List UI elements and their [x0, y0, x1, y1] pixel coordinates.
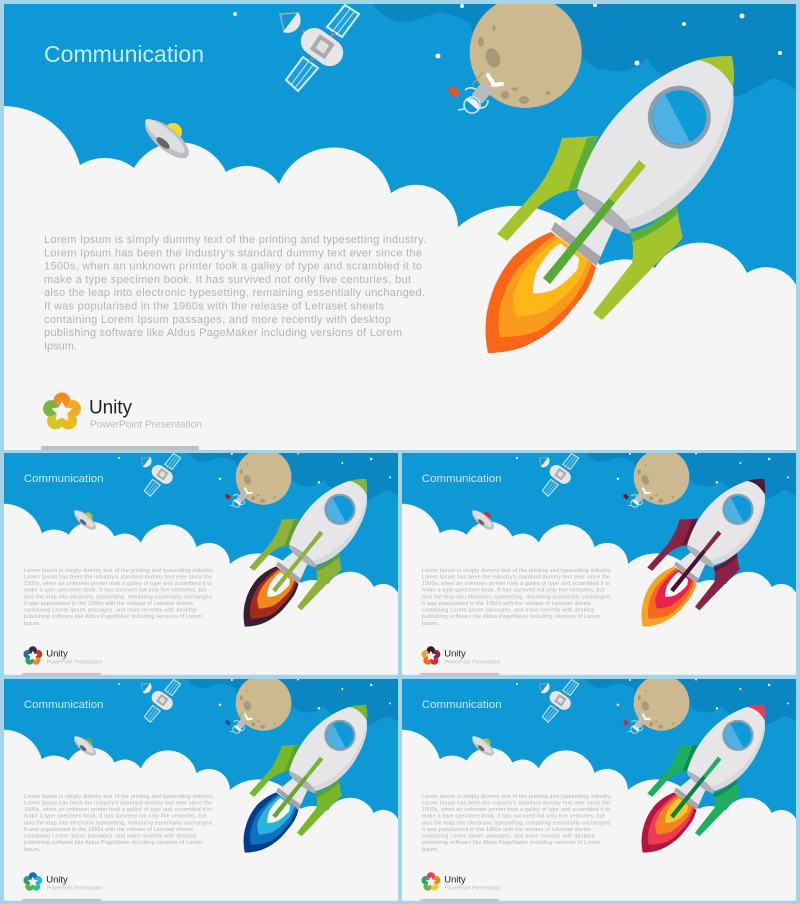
body text: publishing software like Aldus PageMaker including versions of Lorem — [422, 840, 600, 846]
title: Communication — [24, 473, 104, 485]
body text: Lorem Ipsum has been the industry's standard dummy text ever since the — [422, 801, 610, 807]
rocket — [486, 56, 734, 353]
body text: also the leap into electronic typesetting, remaining essentially unchanged. — [24, 820, 214, 826]
logo subtitle: PowerPoint Presentation — [47, 886, 103, 892]
astronaut — [225, 713, 252, 733]
logo subtitle: PowerPoint Presentation — [47, 660, 103, 666]
footer bar — [420, 899, 499, 901]
body text: Ipsum. — [422, 847, 439, 853]
astronaut — [225, 487, 252, 507]
logo wordmark: Unity — [46, 875, 68, 886]
panel: slide variant maroon — [402, 449, 797, 675]
sky background — [402, 679, 796, 901]
body text: It was popularised in the 1960s with the release of Letraset sheets — [422, 827, 591, 833]
ufo — [74, 510, 96, 530]
body text — [24, 568, 214, 627]
panel: slide variant red flame — [4, 449, 399, 675]
astronaut — [623, 713, 650, 733]
body text: also the leap into electronic typesetting, remaining essentially unchanged. — [44, 287, 425, 299]
logo wordmark: Unity — [89, 398, 132, 418]
body text: It was popularised in the 1960s with the release of Letraset sheets — [24, 827, 193, 833]
panel: slide variant blue flame — [4, 675, 399, 901]
logo subtitle: PowerPoint Presentation — [90, 420, 202, 430]
satellite — [539, 679, 579, 722]
body text: Lorem Ipsum is simply dummy text of the printing and typesetting industry. — [24, 568, 214, 574]
body text — [24, 794, 214, 853]
stars — [233, 3, 782, 66]
body text: Ipsum. — [422, 621, 439, 627]
body text: make a type specimen book. It has survived not only five centuries, but — [24, 588, 207, 594]
logo wordmark: Unity — [444, 649, 466, 660]
sky background — [4, 679, 398, 901]
body text: 1500s, when an unknown printer took a galley of type and scrambled it to — [422, 807, 610, 813]
body text — [422, 794, 612, 853]
dark sky band — [373, 4, 797, 100]
rocket — [642, 705, 765, 853]
logo wordmark: Unity — [46, 649, 68, 660]
title: Communication — [44, 41, 204, 67]
moon — [634, 449, 689, 505]
moon — [236, 675, 291, 731]
body text: publishing software like Aldus PageMaker including versions of Lorem — [24, 614, 202, 620]
logo icon — [23, 646, 42, 665]
ufo — [469, 507, 497, 533]
body text: Lorem Ipsum is simply dummy text of the printing and typesetting industry. — [24, 794, 214, 800]
ufo — [469, 733, 497, 759]
body text: containing Lorem Ipsum passages, and more recently with desktop — [422, 608, 595, 614]
satellite — [141, 679, 181, 722]
body text: 1500s, when an unknown printer took a galley of type and scrambled it to — [24, 581, 212, 587]
logo icon — [420, 646, 441, 666]
rocket — [642, 479, 765, 627]
body text: containing Lorem Ipsum passages, and more recently with desktop — [44, 314, 391, 326]
body text: containing Lorem Ipsum passages, and more recently with desktop — [24, 834, 197, 840]
ufo — [145, 119, 189, 158]
sky background — [4, 453, 398, 675]
stars — [118, 453, 391, 484]
body text: make a type specimen book. It has survived not only five centuries, but — [24, 814, 207, 820]
satellite — [141, 453, 181, 496]
logo icon — [43, 392, 81, 430]
body text: Lorem Ipsum is simply dummy text of the printing and typesetting industry. — [422, 794, 612, 800]
dark sky band — [188, 679, 399, 727]
body text: publishing software like Aldus PageMaker including versions of Lorem — [422, 614, 600, 620]
clouds — [402, 730, 797, 901]
footer bar — [22, 673, 101, 675]
clouds — [4, 106, 797, 451]
logo wordmark: Unity — [444, 875, 466, 886]
body text: Lorem Ipsum has been the industry's standard dummy text ever since the — [422, 575, 610, 581]
panel: slide variant crimson flame — [402, 675, 797, 901]
body text: containing Lorem Ipsum passages, and more recently with desktop — [422, 834, 595, 840]
body text: 1500s, when an unknown printer took a galley of type and scrambled it to — [422, 581, 610, 587]
body text: make a type specimen book. It has survived not only five centuries, but — [422, 588, 605, 594]
body text: Lorem Ipsum is simply dummy text of the printing and typesetting industry. — [422, 568, 612, 574]
body text: also the leap into electronic typesetting, remaining essentially unchanged. — [422, 820, 612, 826]
body text: It was popularised in the 1960s with the release of Letraset sheets — [422, 601, 591, 607]
body text: also the leap into electronic typesetting, remaining essentially unchanged. — [24, 594, 214, 600]
body text: Lorem Ipsum is simply dummy text of the printing and typesetting industry. — [44, 234, 426, 246]
stars — [118, 679, 391, 710]
stars — [516, 679, 789, 710]
title: Communication — [422, 699, 502, 711]
dark sky band — [586, 679, 797, 727]
satellite — [539, 453, 579, 496]
body text: Lorem Ipsum has been the industry's standard dummy text ever since the — [44, 247, 422, 259]
footer bar — [41, 446, 199, 450]
satellite — [280, 5, 359, 91]
rocket — [244, 705, 367, 853]
body text: publishing software like Aldus PageMaker including versions of Lorem — [24, 840, 202, 846]
astronaut — [623, 487, 650, 507]
footer bar — [22, 899, 101, 901]
logo subtitle: PowerPoint Presentation — [445, 660, 501, 666]
stars — [516, 453, 789, 484]
body text: 1500s, when an unknown printer took a galley of type and scrambled it to — [24, 807, 212, 813]
body text: Lorem Ipsum has been the industry's standard dummy text ever since the — [24, 575, 212, 581]
moon — [634, 675, 689, 731]
body text: also the leap into electronic typesetting, remaining essentially unchanged. — [422, 594, 612, 600]
rocket — [244, 479, 367, 627]
body text: It was popularised in the 1960s with the release of Letraset sheets — [44, 300, 384, 312]
body text: Ipsum. — [24, 621, 41, 627]
footer bar — [420, 673, 499, 675]
title: Communication — [24, 699, 104, 711]
clouds — [4, 730, 399, 901]
logo subtitle: PowerPoint Presentation — [445, 886, 501, 892]
dark sky band — [586, 453, 797, 501]
clouds — [402, 504, 797, 675]
sky background — [402, 453, 796, 675]
panel: main slide — [4, 0, 797, 451]
body text: make a type specimen book. It has survived not only five centuries, but — [44, 274, 411, 286]
moon — [236, 449, 291, 505]
body text: Lorem Ipsum has been the industry's standard dummy text ever since the — [24, 801, 212, 807]
body text — [44, 234, 426, 352]
ufo — [71, 733, 99, 759]
body text: It was popularised in the 1960s with the release of Letraset sheets — [24, 601, 193, 607]
sky background — [4, 4, 796, 285]
dark sky band — [188, 453, 399, 501]
body text: publishing software like Aldus PageMaker including versions of Lorem — [44, 327, 402, 339]
body text — [422, 568, 612, 627]
title: Communication — [422, 473, 502, 485]
astronaut — [449, 72, 502, 113]
body text: Ipsum. — [44, 340, 77, 352]
clouds — [4, 504, 399, 675]
body text: make a type specimen book. It has survived not only five centuries, but — [422, 814, 605, 820]
moon — [470, 0, 582, 108]
body text: containing Lorem Ipsum passages, and more recently with desktop — [24, 608, 197, 614]
logo icon — [420, 872, 441, 892]
body text: 1500s, when an unknown printer took a galley of type and scrambled it to — [44, 261, 422, 273]
logo icon — [22, 872, 43, 892]
body text: Ipsum. — [24, 847, 41, 853]
